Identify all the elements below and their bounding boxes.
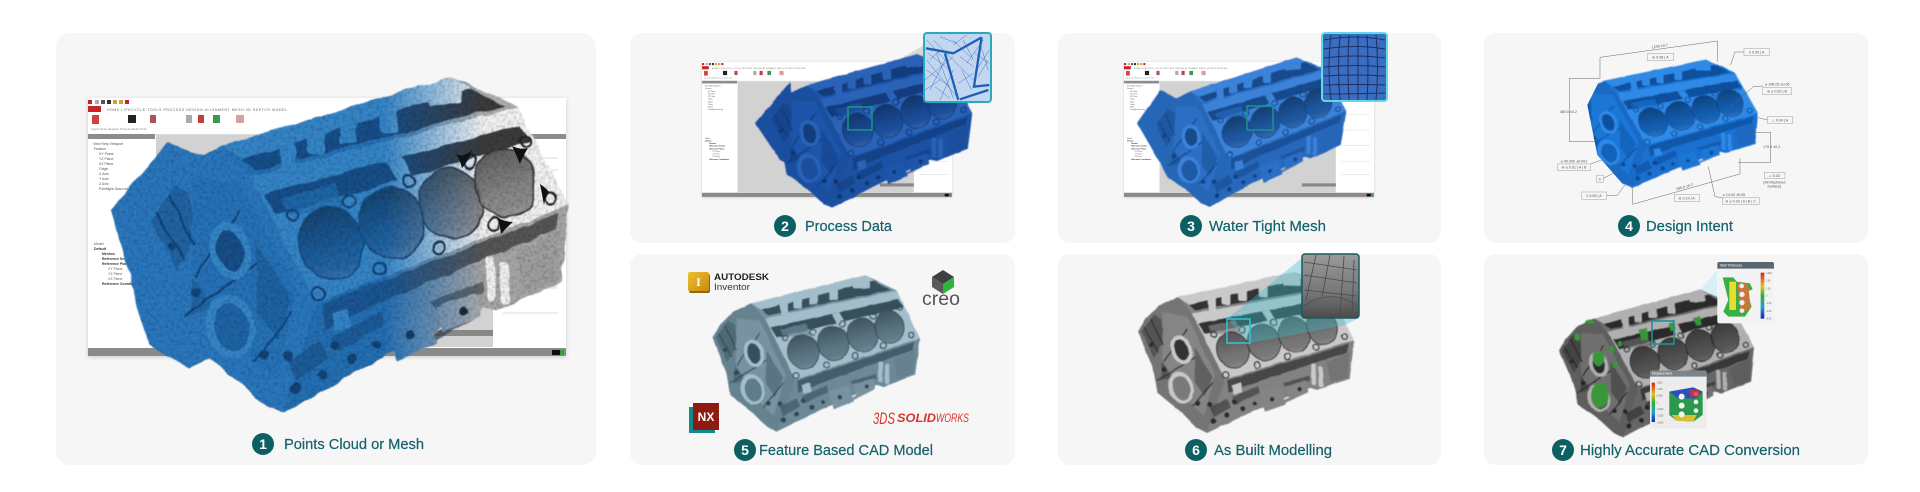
- highlight box: [1227, 319, 1250, 343]
- panel: design intent: [1484, 33, 1868, 243]
- logo: SolidWorks: SOLID: [897, 413, 936, 425]
- software window: points cloud: [88, 98, 566, 356]
- logo: Creo: creo: [922, 289, 960, 310]
- card: wall thickness: 1.00: [1766, 288, 1771, 290]
- inset: raw mesh detail: [924, 33, 991, 102]
- GD&T dimensions and callouts: 480.0 ±0.2: [1560, 110, 1577, 114]
- logo: NX: NX: [698, 410, 714, 424]
- logo: Autodesk Inventor: [688, 272, 770, 293]
- logo: NX: [689, 403, 719, 433]
- label 3: Water Tight Mesh: [1209, 218, 1326, 235]
- card: displacement: 1.800: [1657, 382, 1663, 384]
- GD&T dimensions and callouts: // 0.05 | A: [1586, 194, 1602, 198]
- logo: SolidWorks: [873, 409, 969, 428]
- engine block: dark blue: [755, 52, 974, 210]
- label 4: 4: [1625, 218, 1633, 234]
- GD&T dimensions and callouts: 685.0 ±0.2: [1676, 183, 1694, 191]
- label 5: 5: [741, 442, 749, 458]
- silhouette trim: left side of block: [1560, 70, 1624, 190]
- card: wall thickness: -2.00: [1766, 311, 1772, 313]
- engine block: bright blue: [1568, 56, 1762, 191]
- logo: Autodesk Inventor: Inventor: [714, 282, 750, 292]
- card: wall thickness: [1717, 262, 1774, 323]
- label 1: [252, 433, 424, 455]
- label 1: Points Cloud or Mesh: [284, 436, 424, 453]
- GD&T dimensions and callouts: Surface): [1767, 184, 1781, 188]
- software window: water tight mesh: [1124, 62, 1374, 197]
- card: displacement: [1650, 371, 1707, 429]
- engine block: grey scan: [139, 72, 576, 419]
- GD&T dimensions and callouts: ⊚ ⌀ 0.02 | A | B | C: [1725, 199, 1756, 203]
- panel: feature based CAD model: [630, 254, 1015, 465]
- label 3: 3: [1187, 218, 1195, 234]
- label 4: Design Intent: [1646, 218, 1734, 235]
- label 3: [1180, 215, 1326, 237]
- card: displacement: 0.600: [1657, 396, 1663, 398]
- panel: as built modelling: [1058, 254, 1441, 465]
- card: displacement: -1.200: [1657, 416, 1664, 418]
- GD&T dimensions and callouts: ⌀ 90.000 ±0.001: [1561, 159, 1587, 163]
- engine block: mid blue: [1137, 54, 1348, 212]
- GD&T dimensions and callouts: ⊚ ⌀ 0.01 | A | B: [1562, 166, 1587, 170]
- logo: Autodesk Inventor: I: [696, 275, 701, 289]
- GD&T dimensions and callouts: ⌀ 14.00 ±0.05: [1723, 193, 1745, 197]
- highlight box: [1247, 106, 1273, 130]
- highlight box: [848, 107, 872, 130]
- panel: process data: [630, 33, 1015, 243]
- panel: points cloud or mesh: [56, 33, 596, 465]
- label 7: [1552, 439, 1800, 461]
- label 2: [774, 215, 893, 237]
- zoom beam: [1674, 270, 1717, 323]
- GD&T dimensions and callouts: C: [1599, 177, 1602, 181]
- card: displacement: -1.800: [1657, 422, 1664, 424]
- label 5: [734, 439, 933, 461]
- card: wall thickness: -3.00: [1766, 318, 1772, 320]
- card: wall thickness: -1.00: [1766, 303, 1772, 305]
- label 2: 2: [781, 218, 789, 234]
- engine block: dark grey with green deviations: [1557, 288, 1758, 438]
- label 7: 7: [1559, 442, 1567, 458]
- card: displacement: -0.600: [1657, 409, 1664, 411]
- software window: process data: [702, 62, 952, 197]
- logo: SolidWorks: WORKS: [936, 413, 969, 425]
- inset: surface patch detail: [1302, 254, 1359, 318]
- GD&T dimensions and callouts: 170.0 ±0.2: [1763, 145, 1780, 149]
- GD&T dimensions and callouts: ⊚ ⌀ 0.02 | B: [1767, 89, 1787, 93]
- GD&T dimensions and callouts: ⏥ 0.02: [1769, 174, 1780, 178]
- GD&T dimensions and callouts: // 0.05 | A: [1749, 51, 1765, 55]
- GD&T dimensions and callouts: ⊚ 0.10 | A: [1678, 196, 1695, 200]
- card: wall thickness: Wall Thickness: [1720, 264, 1743, 268]
- label 2: Process Data: [805, 218, 893, 235]
- zoom beam: [1227, 258, 1359, 343]
- label 6: As Built Modelling: [1214, 442, 1332, 459]
- card: wall thickness: 0: [1766, 296, 1768, 298]
- label 1: 1: [259, 436, 267, 452]
- label 6: 6: [1192, 442, 1200, 458]
- engine block: slate CAD model: [713, 275, 920, 432]
- card: displacement: 1.200: [1657, 389, 1663, 391]
- GD&T dimensions and callouts: [1557, 41, 1793, 204]
- label 5: Feature Based CAD Model: [759, 442, 933, 459]
- label 4: [1618, 215, 1734, 237]
- logo: Creo: [922, 270, 960, 310]
- label 6: [1185, 439, 1332, 461]
- engine block: grey as-built: [1137, 266, 1356, 438]
- GD&T dimensions and callouts: 1200 ±0.7: [1652, 43, 1668, 49]
- card: displacement: Displacement: [1652, 372, 1672, 376]
- GD&T dimensions and callouts: (All Machined: [1763, 181, 1785, 185]
- card: wall thickness: 3.000: [1766, 273, 1773, 275]
- logo: SolidWorks: 3DS: [873, 409, 895, 428]
- dark coolant holes on deck: [456, 146, 549, 234]
- panel: water tight mesh: [1058, 33, 1441, 243]
- GD&T dimensions and callouts: ⊚ 0.08 | A: [1652, 55, 1669, 59]
- GD&T dimensions and callouts: ⊥ 0.04 | A: [1772, 118, 1789, 122]
- label 7: Highly Accurate CAD Conversion: [1580, 442, 1800, 459]
- card: displacement: 0: [1657, 402, 1659, 404]
- inset: water tight grid: [1322, 33, 1387, 101]
- highlight box: [1652, 321, 1674, 344]
- logo: Autodesk Inventor: AUTODESK: [714, 272, 770, 282]
- zoom wedge: [872, 45, 924, 107]
- GD&T dimensions and callouts: ⌀ 108.05 ±0.05: [1765, 83, 1790, 87]
- panel: highly accurate CAD conversion: [1484, 254, 1868, 465]
- engine block: blue point cloud overlay: [110, 77, 481, 413]
- card: wall thickness: 2.00: [1766, 280, 1771, 282]
